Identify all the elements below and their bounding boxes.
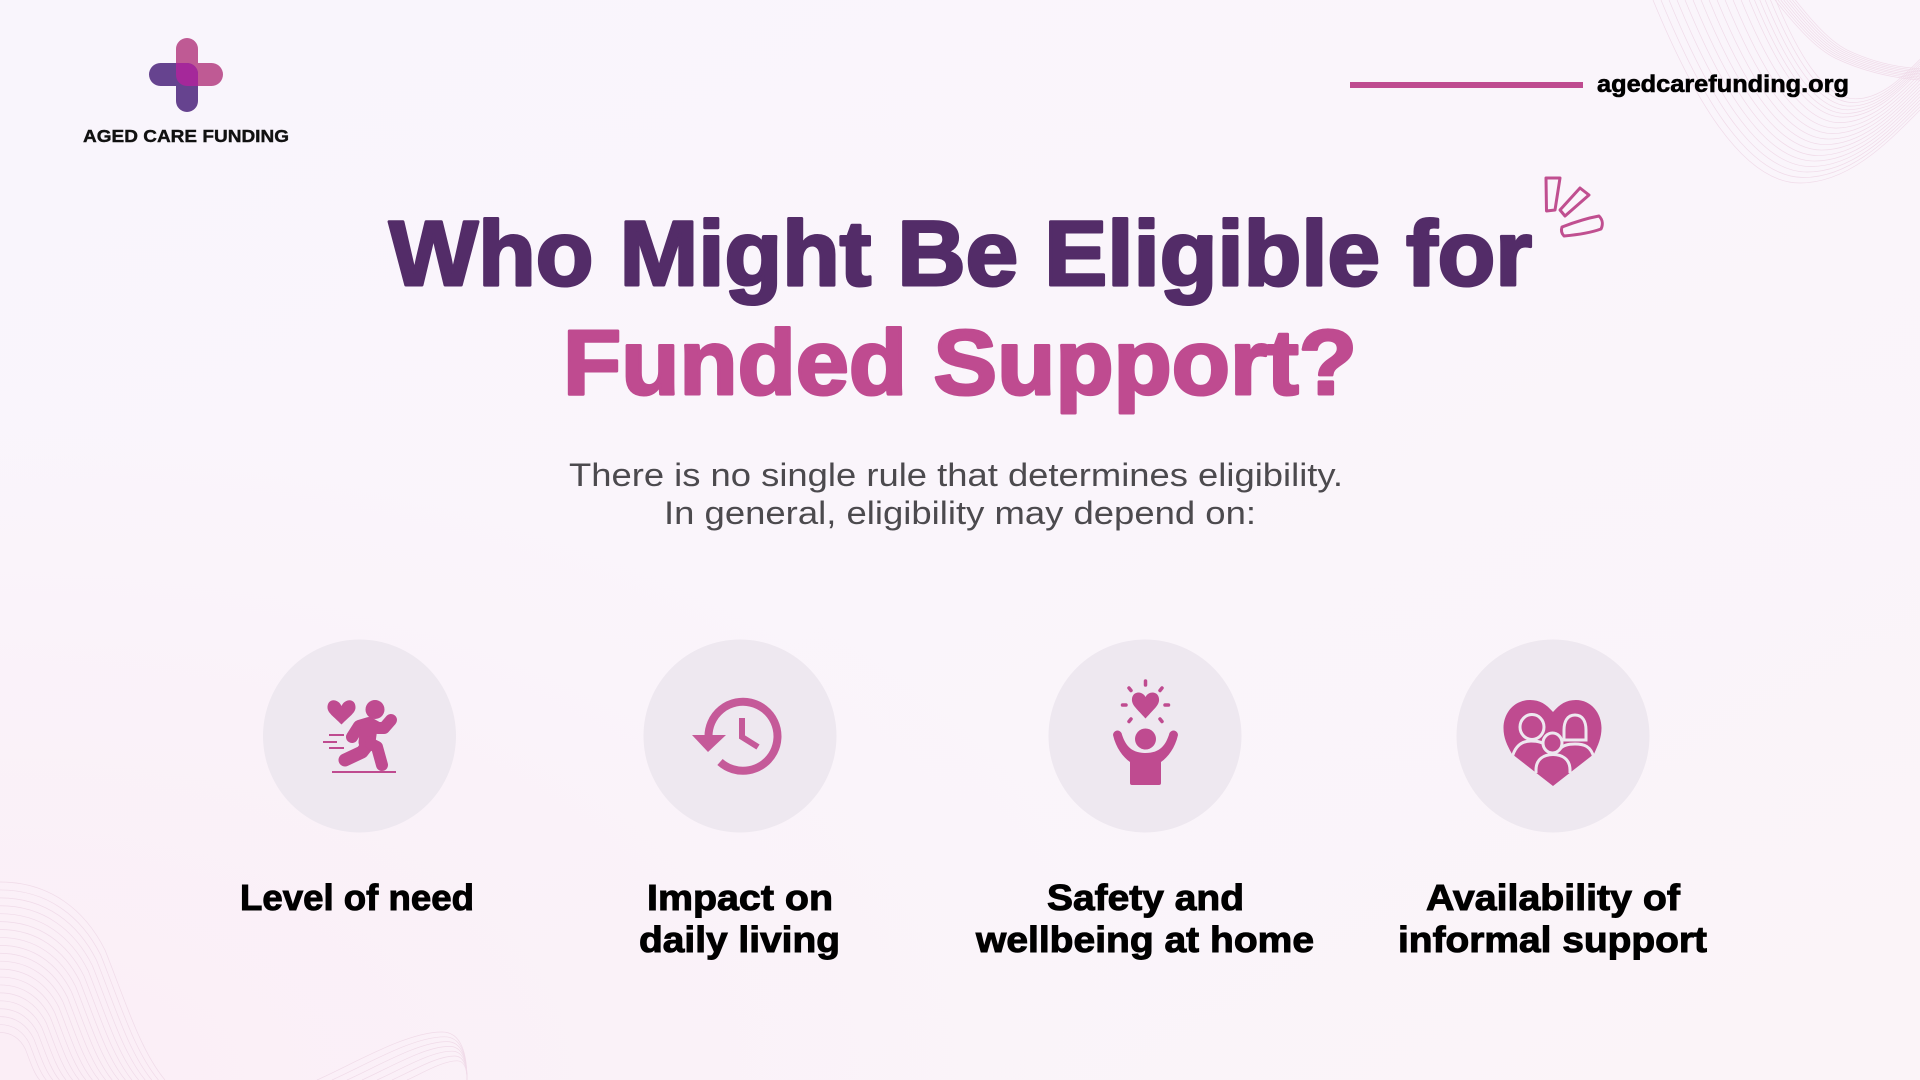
website address: agedcarefunding.org: [1597, 71, 1849, 98]
label: Availability of informal support: [1398, 877, 1707, 960]
label: Availability of informal support: Availability of: [1426, 877, 1681, 918]
logo: Aged Care Funding: [83, 38, 289, 146]
label: Level of need: Level of need: [240, 877, 474, 918]
subtitle: [569, 457, 1343, 531]
subtitle line 2: In general, eligibility may depend on:: [664, 495, 1256, 531]
icon: emphasis marks: [1546, 178, 1602, 236]
label: Safety and wellbeing at home: [975, 877, 1314, 960]
title line 2: Funded Support?: [563, 312, 1357, 414]
item: Availability of informal support: [1398, 640, 1707, 960]
item: Level of need: [240, 640, 474, 918]
label: Safety and wellbeing at home: wellbeing at home: [975, 919, 1314, 960]
title: [389, 203, 1532, 414]
item: Impact on daily living: [639, 640, 840, 960]
icon: running person with heart: [323, 700, 396, 772]
icon: medical cross: [149, 38, 223, 112]
label: Impact on daily living: [639, 877, 840, 960]
label: Impact on daily living: Impact on: [647, 877, 833, 918]
subtitle line 1: There is no single rule that determines eligibility.: [569, 457, 1343, 493]
logo wordmark: AGED CARE FUNDING: [83, 126, 289, 146]
icon circle: [1456, 640, 1650, 832]
label: Availability of informal support: informal support: [1398, 919, 1707, 960]
item: Safety and wellbeing at home: [975, 640, 1314, 960]
icon circle: [644, 640, 836, 832]
title line 1: Who Might Be Eligible for: [389, 203, 1532, 305]
icon: family in heart: [1504, 700, 1602, 786]
icon circle: [1048, 640, 1242, 832]
label: Safety and wellbeing at home: Safety and: [1047, 877, 1244, 918]
icon: person with raised arms and heart: [1113, 681, 1178, 785]
header rule: [1350, 82, 1583, 88]
icon: clock with reverse arrow: [692, 702, 777, 771]
label: Impact on daily living: daily living: [639, 919, 840, 960]
icon circle: [263, 640, 456, 832]
